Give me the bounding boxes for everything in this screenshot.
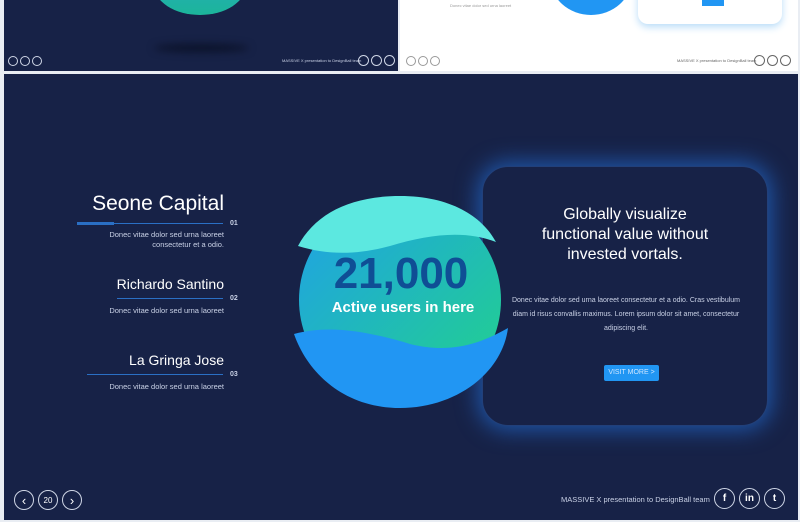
text: consectetur et a odio. bbox=[152, 240, 224, 249]
list item 02: 02 bbox=[230, 295, 238, 302]
footer nav: ‹ bbox=[22, 492, 26, 508]
social icons: in bbox=[745, 493, 754, 504]
card heading: functional value without bbox=[542, 226, 708, 243]
button bbox=[604, 365, 659, 381]
nav circles bbox=[406, 56, 440, 66]
list item 03: Donec vitae dolor sed urna laoreet bbox=[109, 382, 224, 391]
list item 03 bbox=[87, 352, 238, 391]
list item 03: La Gringa Jose bbox=[129, 352, 224, 368]
blue circle bbox=[550, 0, 632, 15]
small caption: Donec vitae dolor sed urna laoreet bbox=[450, 3, 511, 8]
number: 21,000 bbox=[334, 249, 468, 298]
card heading bbox=[542, 206, 708, 263]
card panel bbox=[482, 166, 768, 426]
footer nav bbox=[14, 490, 82, 510]
social icons: t bbox=[773, 493, 776, 504]
footer text: MASSIVE X presentation to DesignBall team bbox=[561, 495, 710, 504]
list item 02: Richardo Santino bbox=[117, 276, 224, 292]
label: Active users in here bbox=[332, 299, 474, 316]
list item 02: Donec vitae dolor sed urna laoreet bbox=[109, 306, 224, 315]
thumbnail: right white slide bbox=[400, 0, 798, 71]
heading: Seone Capital bbox=[92, 192, 224, 215]
nav circles bbox=[8, 56, 42, 66]
card heading: invested vortals. bbox=[567, 246, 683, 263]
list item 03: 03 bbox=[230, 371, 238, 378]
text: Donec vitae dolor sed urna laoreet bbox=[109, 230, 224, 239]
white card bbox=[638, 0, 782, 24]
chart: stat circle bbox=[294, 196, 508, 408]
thumbnail: left dark slide bbox=[4, 0, 398, 71]
footer text: MASSIVE X presentation to DesignBall team bbox=[677, 58, 756, 63]
footer nav: › bbox=[70, 492, 74, 508]
card heading: Globally visualize bbox=[563, 206, 687, 223]
list item 02 bbox=[109, 276, 238, 315]
line bbox=[77, 223, 223, 224]
icon: thumbnail circle bbox=[154, 0, 246, 15]
button: VISIT MORE > bbox=[608, 369, 655, 376]
social bbox=[358, 55, 395, 66]
footer text: MASSIVE X presentation to DesignBall team bbox=[282, 58, 361, 63]
list item 01: 01 bbox=[230, 220, 238, 227]
list item 01 bbox=[77, 192, 238, 249]
text bbox=[109, 230, 224, 249]
teal cap bbox=[298, 196, 496, 253]
card body: Donec vitae dolor sed urna laoreet consectetur et a odio. Cras vestibulum diam id risus convallis maximus. Lorem ipsum dolor sit amet, consectetur adipiscing elit. bbox=[512, 297, 740, 332]
social icons: f bbox=[723, 493, 726, 504]
footer nav: 20 bbox=[44, 496, 52, 504]
social bbox=[754, 55, 791, 66]
social icons bbox=[714, 488, 785, 509]
shadow bbox=[154, 44, 249, 52]
blue bottom bbox=[294, 328, 508, 408]
